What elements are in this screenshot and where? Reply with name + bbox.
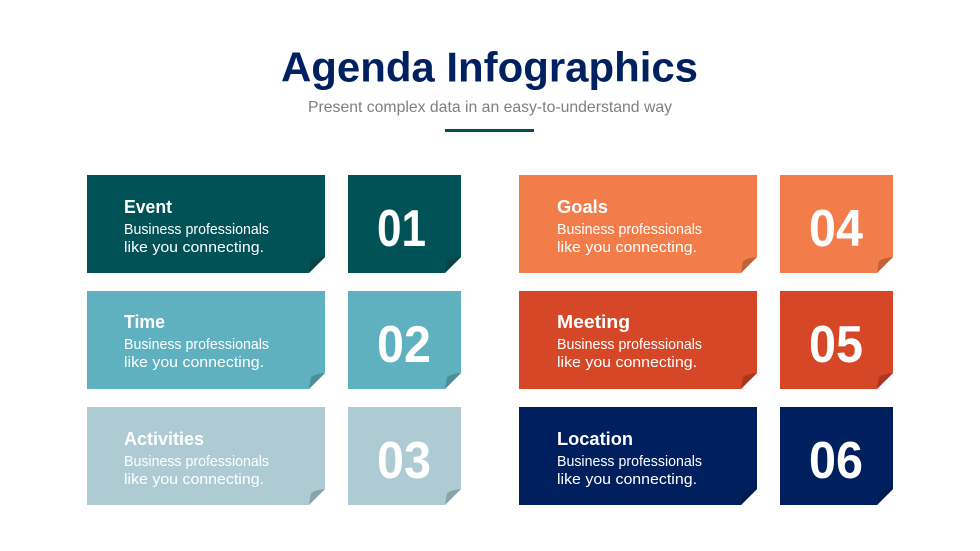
panel: number 03: 03	[377, 432, 431, 490]
panel: Event: like you connecting.	[124, 239, 264, 256]
panel: Time: like you connecting.	[124, 354, 264, 371]
panel: Event: Business professionals	[124, 221, 269, 238]
panel: Activities: Business professionals	[124, 453, 269, 470]
panel: Time	[87, 291, 325, 389]
panel: number 03	[348, 407, 461, 505]
panel: Location: Business professionals	[557, 453, 702, 470]
panel: number 05	[780, 291, 893, 389]
panel: Time: Time	[124, 311, 165, 332]
panel: Goals: like you connecting.	[557, 239, 697, 256]
panel: Goals: Business professionals	[557, 221, 702, 238]
title: Agenda Infographics	[281, 44, 698, 90]
panel: number 01: 01	[377, 200, 426, 258]
panel: Event: Event	[124, 196, 172, 217]
panel: Location: like you connecting.	[557, 471, 697, 488]
panel: Goals	[519, 175, 757, 273]
panel: Location: Location	[557, 428, 633, 449]
title underline	[445, 129, 534, 132]
panel: Activities: like you connecting.	[124, 471, 264, 488]
panel: Event	[87, 175, 325, 273]
panel: number 01	[348, 175, 461, 273]
panel: Goals: Goals	[557, 196, 608, 217]
panel: Time: Business professionals	[124, 336, 269, 353]
panel: number 04: 04	[809, 200, 863, 258]
panel: Activities: Activities	[124, 428, 204, 449]
panel: Meeting: Business professionals	[557, 336, 702, 353]
panel: number 04	[780, 175, 893, 273]
panel: number 02: 02	[377, 316, 431, 374]
panel: number 06: 06	[809, 432, 863, 490]
panel: Meeting: like you connecting.	[557, 354, 697, 371]
panel: number 02	[348, 291, 461, 389]
panel: Activities	[87, 407, 325, 505]
panel: number 05: 05	[809, 316, 863, 374]
panel: number 06	[780, 407, 893, 505]
panel: Meeting: Meeting	[557, 311, 630, 332]
subtitle: Present complex data in an easy-to-understand way	[308, 99, 672, 116]
panel: Meeting	[519, 291, 757, 389]
panel: Location	[519, 407, 757, 505]
